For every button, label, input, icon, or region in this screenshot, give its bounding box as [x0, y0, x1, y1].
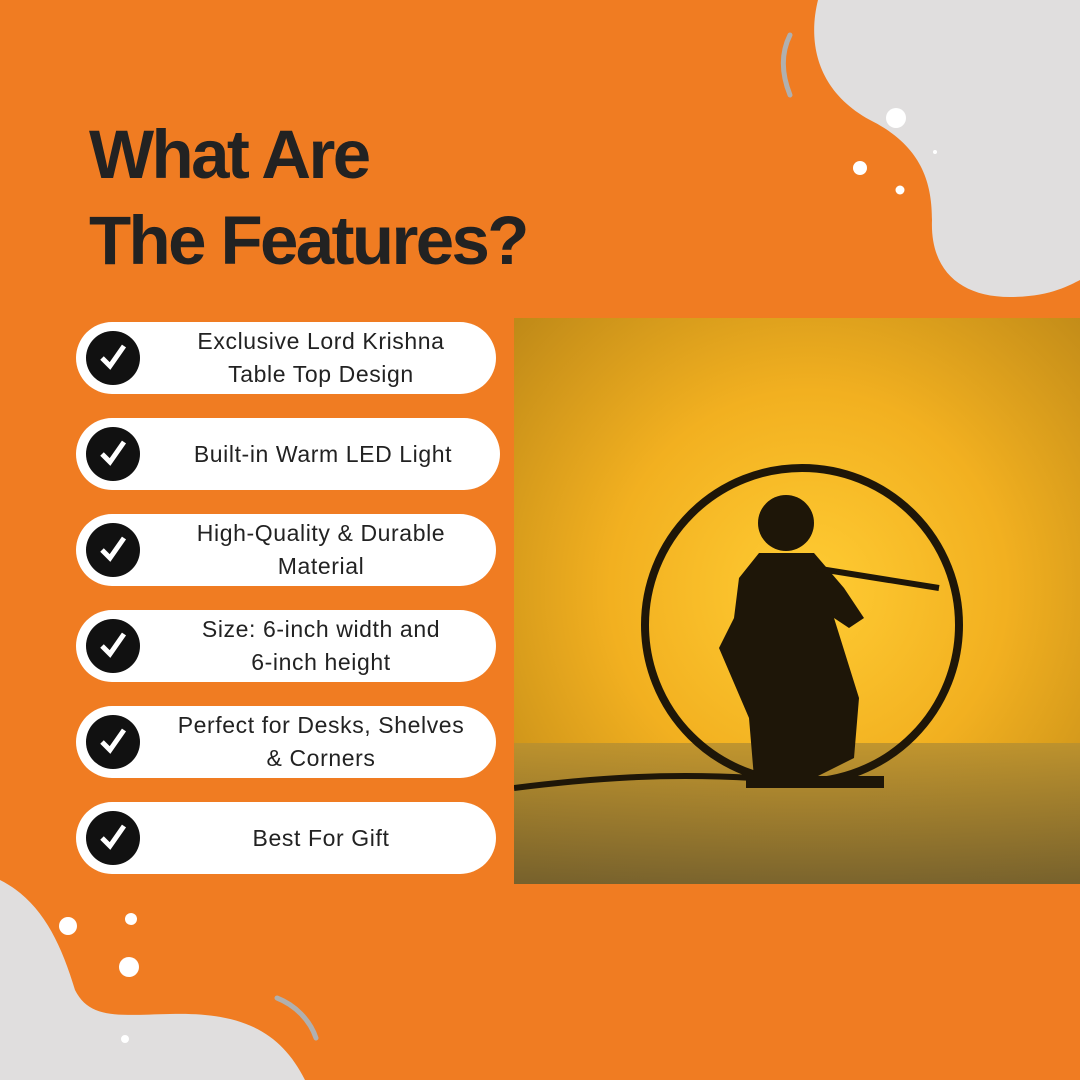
feature pill 4: [76, 610, 496, 682]
title: What Are: [89, 116, 368, 193]
feature pill 4: 6-inch height: [251, 649, 391, 675]
feature pill 5: & Corners: [267, 745, 375, 771]
feature pill 6: Best For Gift: [253, 824, 389, 850]
feature pill 3: [76, 514, 496, 586]
feature pill 6: [76, 802, 496, 874]
feature pill 1: Table Top Design: [228, 361, 414, 387]
feature pill 4: Size: 6-inch width and: [202, 616, 440, 642]
feature pill 5: Perfect for Desks, Shelves: [178, 712, 464, 738]
feature pill 2: Built-in Warm LED Light: [194, 440, 452, 466]
product photo: [514, 318, 1080, 884]
title: [89, 116, 527, 279]
feature pill 3: Material: [278, 553, 364, 579]
feature pill 2: [76, 418, 500, 490]
feature pill 5: [76, 706, 496, 778]
feature pill 1: [76, 322, 496, 394]
feature pill 1: Exclusive Lord Krishna: [197, 328, 445, 354]
title: The Features?: [89, 202, 527, 279]
feature pill 3: High-Quality & Durable: [197, 520, 445, 546]
